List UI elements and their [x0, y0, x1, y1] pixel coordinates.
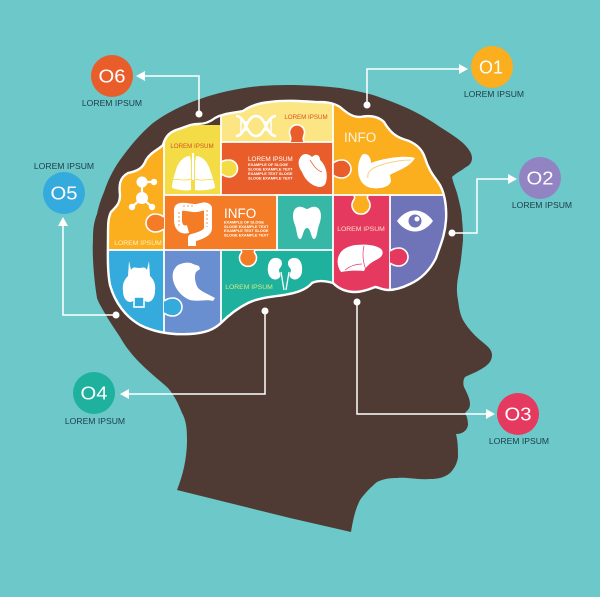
icon: stomach [173, 263, 215, 301]
icon: thyroid [123, 261, 155, 307]
badge 06: O6 [98, 66, 126, 86]
panel label: DNA: LOREM IPSUM [284, 114, 328, 121]
badge 05: O5 [50, 184, 78, 204]
panel label: kidneys: LOREM IPSUM [225, 284, 273, 291]
panel label: lungs: LOREM IPSUM [170, 143, 214, 150]
connector 01 [364, 64, 468, 108]
icon: pancreas [358, 154, 415, 188]
badge 01 [464, 46, 524, 99]
badge 03: O3 [504, 404, 532, 424]
panel text: INFO colon: SLOGE EXAMPLE TEXT [224, 232, 269, 237]
panel text: INFO colon [224, 206, 269, 237]
badge 05: LOREM IPSUM [34, 161, 94, 171]
badge 05 [34, 161, 94, 214]
panel label: molecule: LOREM IPSUM [114, 240, 162, 247]
badge 06: LOREM IPSUM [82, 98, 142, 108]
icon: tooth [293, 207, 321, 239]
icon: heart [299, 154, 327, 187]
panel text: heart: SLOGE EXAMPLE TEXT [248, 176, 293, 180]
panel text: heart [248, 156, 293, 180]
connector 04 [120, 308, 268, 399]
connector 03 [354, 298, 495, 419]
connector 02 [448, 174, 517, 236]
panel heading: INFO pancreas: INFO [344, 130, 376, 145]
brain outline [108, 101, 446, 334]
badge 03: LOREM IPSUM [489, 436, 549, 446]
icon: kidneys [268, 258, 302, 290]
icon: eye [397, 210, 433, 232]
connector 05 [58, 217, 120, 318]
brain puzzle [100, 95, 453, 340]
badge 06 [82, 55, 142, 108]
badge 01: O1 [479, 58, 503, 78]
badge 04 [65, 372, 125, 426]
head silhouette [93, 85, 492, 532]
icon: lungs [172, 153, 215, 190]
panel label: liver: LOREM IPSUM [337, 226, 385, 233]
panel text: INFO colon: SLOGE EXAMPLE TEXT [224, 224, 269, 229]
badge 04: LOREM IPSUM [65, 416, 125, 426]
icon: colon [178, 206, 208, 246]
icon: liver [338, 245, 383, 272]
panel text: INFO colon: EXAMPLE TEXT SLOGE [224, 228, 269, 233]
panel text: INFO colon: INFO [224, 206, 256, 221]
badge 04: O4 [80, 384, 108, 404]
badge 02: LOREM IPSUM [512, 200, 572, 210]
badge 03 [489, 393, 549, 446]
badge 02 [512, 157, 572, 210]
icon: molecule [129, 176, 157, 210]
badge 02: O2 [526, 168, 554, 188]
puzzle panels [109, 102, 445, 333]
connector 06 [136, 71, 202, 118]
panel text: heart: SLOGE EXAMPLE TEXT [248, 166, 293, 172]
panel text: heart: EXAMPLE OF SLOGE [248, 162, 288, 167]
panel text: INFO colon: EXAMPLE OF SLOGE [224, 220, 264, 224]
badge 01: LOREM IPSUM [464, 89, 524, 99]
panel text: heart: EXAMPLE TEXT SLOGE [248, 171, 293, 176]
puzzle knobs [146, 125, 408, 316]
panel text: heart: LOREM IPSUM [248, 156, 293, 163]
icon: DNA [236, 116, 276, 136]
